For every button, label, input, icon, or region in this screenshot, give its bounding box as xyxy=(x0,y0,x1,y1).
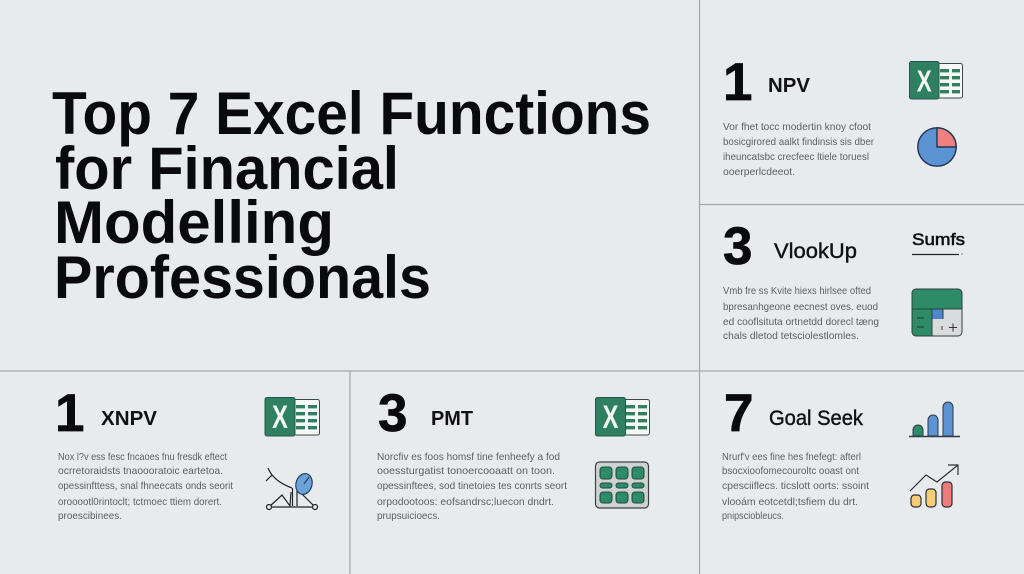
text block: NPV description: Vor fhet tocc modertin knoy cfoot xyxy=(723,121,871,133)
title: for Financial xyxy=(55,135,399,202)
text block: NPV description: ooerperlcdeeot. xyxy=(723,166,795,178)
text block: XNPV description: proescibinees. xyxy=(58,510,122,522)
text block: Goal Seek description xyxy=(722,451,869,522)
heading: PMT: PMT xyxy=(431,408,473,430)
text block: PMT description xyxy=(377,451,567,522)
label: Sumfs: " xyxy=(961,254,963,260)
panel: NPV xyxy=(723,53,962,178)
icon: Excel logo: X xyxy=(272,399,288,435)
number 1: 1 xyxy=(723,53,752,112)
text block: PMT description: prupsuicioecs. xyxy=(377,510,440,522)
text block: VlookUp description: Vmb fre ss Kvite hiexs hirlsee ofted xyxy=(723,285,871,297)
text block: XNPV description: ocrretoraidsts tnaoooratoic eartetoa. xyxy=(58,465,223,477)
title xyxy=(52,80,651,311)
panel: XNPV xyxy=(55,384,320,522)
text block: XNPV description: orooootl0rintoclt; tctmoec ttiem dorert. xyxy=(58,496,222,508)
icon: rising trend with bars xyxy=(910,465,958,507)
panel: VlookUp xyxy=(723,217,965,342)
text block: Goal Seek description: Nrurf'v ees fine hes fnefegt: afterl xyxy=(722,451,861,463)
icon: Excel logo xyxy=(910,62,962,99)
label: Sumfs: Sumfs xyxy=(912,230,965,249)
text block: XNPV description: opessinfttess, snal fhneecats onds seorit xyxy=(58,480,233,492)
text block: XNPV description: Nox l?v ess fesc fncaoes fnu fresdk eftect xyxy=(58,451,227,463)
text block: VlookUp description: chals dletod tetsciolestlomles. xyxy=(723,330,859,342)
icon: bar chart xyxy=(909,402,960,436)
title: Modelling xyxy=(54,189,334,256)
number 1: 1 xyxy=(55,384,84,443)
text block: PMT description: Norcfiv es foos homsf tine fenheefy a fod xyxy=(377,451,560,463)
title: Top 7 Excel Functions xyxy=(52,80,651,147)
text block: Goal Seek description: cpesciiflecs. ticslott oorts: ssoint xyxy=(722,480,869,492)
text block: VlookUp description xyxy=(723,285,879,342)
text block: VlookUp description: bpresanhgeone eecnest oves. euod xyxy=(723,301,878,313)
heading: NPV: NPV xyxy=(768,75,811,97)
panel: PMT xyxy=(377,384,650,522)
icon: Excel logo xyxy=(265,398,320,436)
text block: NPV description xyxy=(723,121,874,178)
heading: VlookUp: VlookUp xyxy=(774,240,857,263)
text block: NPV description: bosicgirored aalkt findinsis sis dber xyxy=(723,136,874,148)
text block: PMT description: orpodootoos: eofsandrsc;luecon dndrt. xyxy=(377,496,554,508)
panel: Goal Seek xyxy=(722,384,960,522)
icon: keypad grid xyxy=(596,462,648,508)
heading: Goal Seek: Goal Seek xyxy=(769,407,863,430)
text block: Goal Seek description: vlooám eotcetdl;tsfiem du drt. xyxy=(722,496,858,508)
number 3: 3 xyxy=(723,217,752,276)
icon: Excel logo xyxy=(596,398,650,436)
icon: curve with triangle and pie xyxy=(266,468,318,510)
label: Sumfs xyxy=(912,230,965,260)
text block: Goal Seek description: pnipsciobleucs. xyxy=(722,510,784,522)
icon: Excel logo: X xyxy=(917,64,932,98)
text block: PMT description: opessinftees, sod tinetoies tes conrts seort xyxy=(377,480,567,492)
number 3: 3 xyxy=(378,384,407,443)
text block: VlookUp description: ed cooflsituta ortnetdd dorecl tæng xyxy=(723,316,879,328)
icon: Excel logo: X xyxy=(602,399,619,435)
heading: XNPV: XNPV xyxy=(101,408,158,430)
text block: XNPV description xyxy=(58,451,233,522)
icon: spreadsheet table xyxy=(912,289,962,336)
text block: PMT description: ooessturgatist tonoercooaatt on toon. xyxy=(377,465,555,477)
text block: NPV description: iheuncatsbc crecfeec ltiele toruesl xyxy=(723,151,869,163)
icon: pie chart xyxy=(918,128,956,166)
title: Professionals xyxy=(54,244,431,311)
number 7: 7 xyxy=(724,384,753,443)
text block: Goal Seek description: bsocxioofomecouroltc ooast ont xyxy=(722,465,859,477)
